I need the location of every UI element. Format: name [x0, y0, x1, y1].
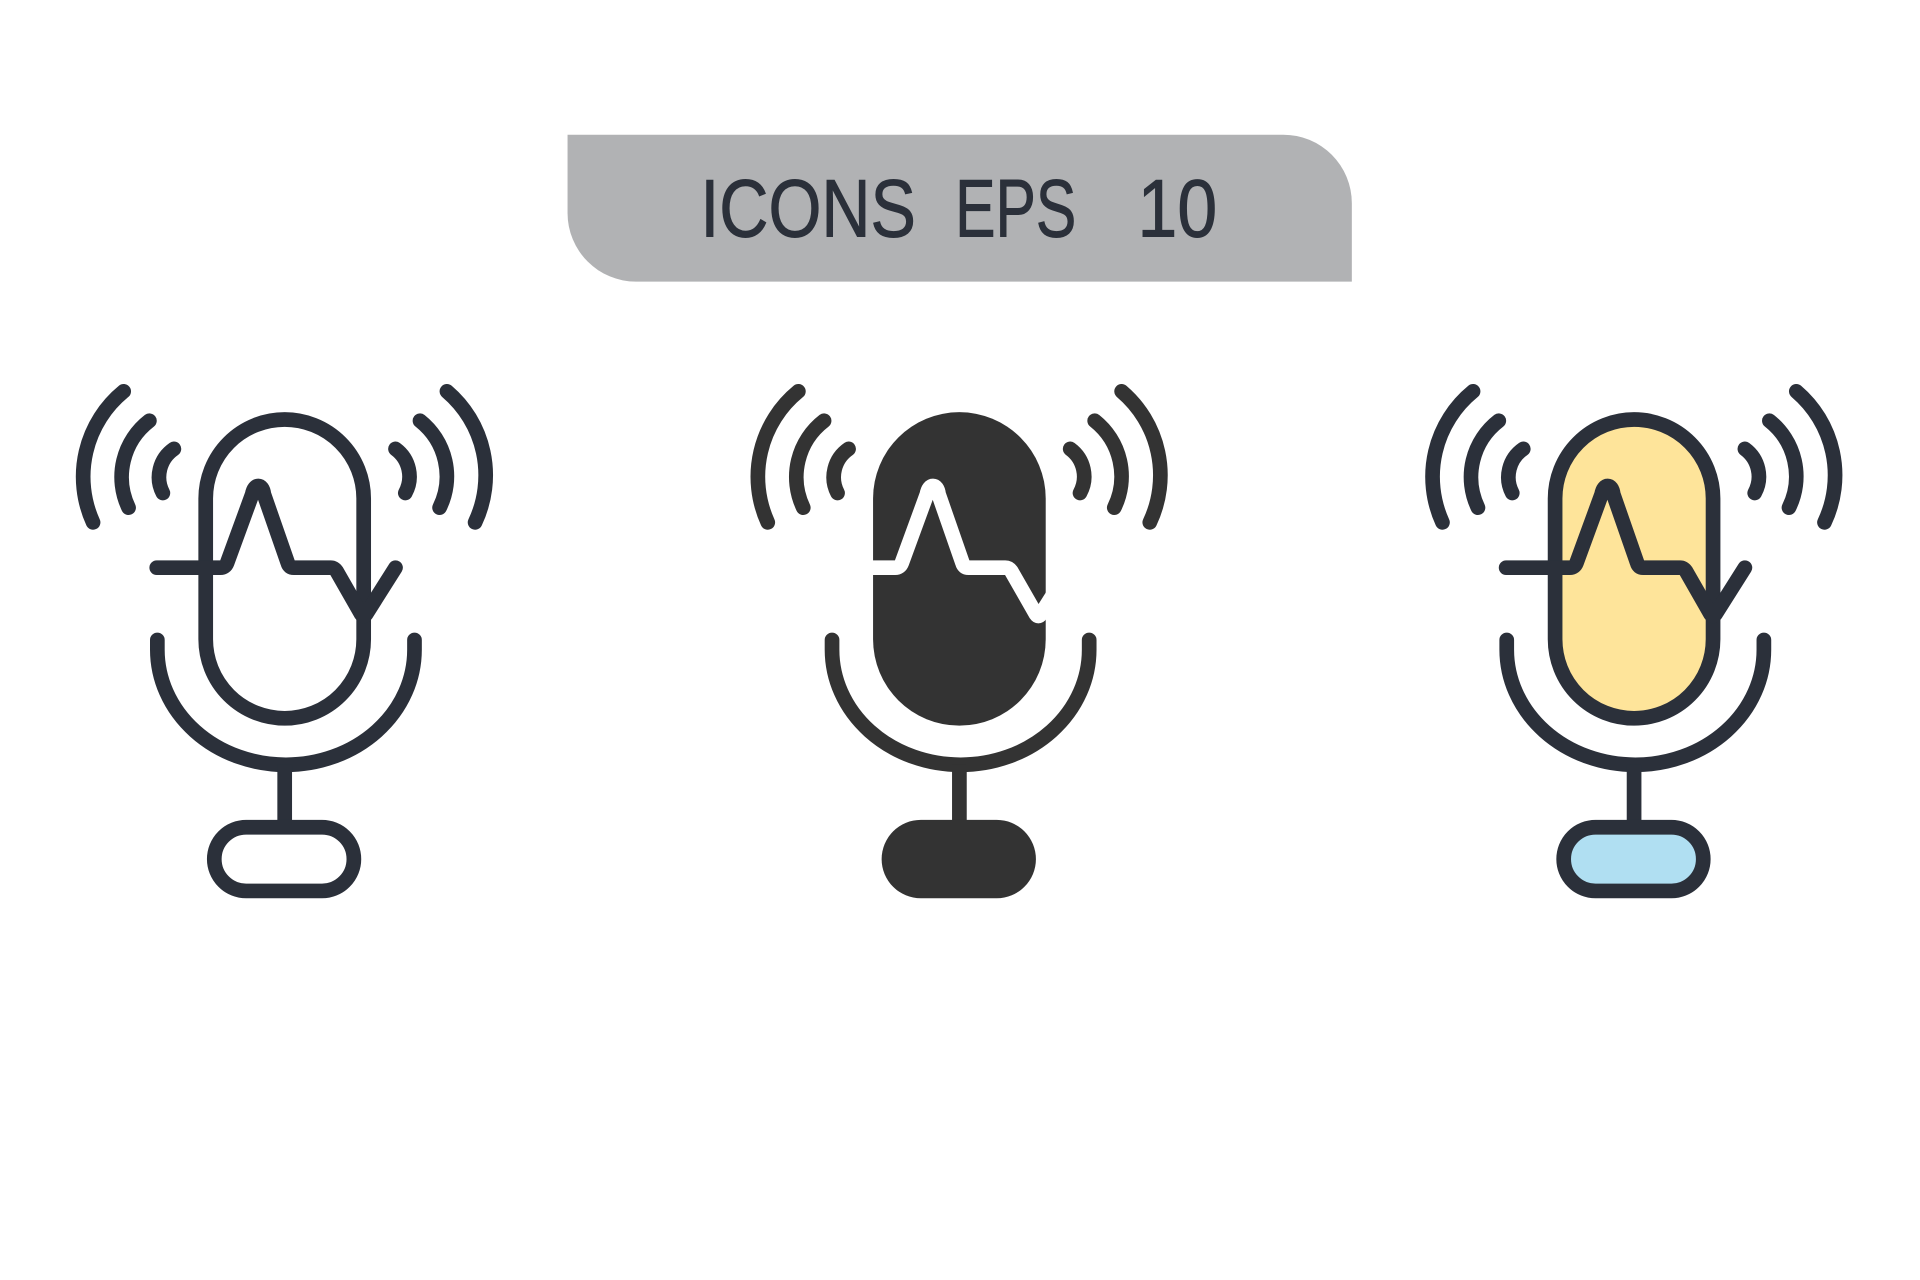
sound waves right: [1070, 391, 1160, 522]
capsule: [873, 412, 1046, 726]
capsule: [206, 420, 364, 718]
icon: outline microphone: [83, 391, 486, 891]
icon: solid microphone: [758, 391, 1160, 898]
sound waves left: [1433, 391, 1523, 522]
banner: ICONS EPS 10: [568, 135, 1352, 282]
sound waves left: [758, 391, 849, 522]
stem: [1628, 765, 1640, 827]
heading text: EPS: [955, 163, 1076, 254]
pulse line: [157, 486, 396, 616]
stem: [953, 765, 965, 827]
banner background: [568, 135, 1352, 282]
heading text: [700, 163, 1217, 254]
pulse line: [1506, 486, 1745, 616]
capsule yellow: [1555, 420, 1713, 718]
sound waves right: [396, 391, 486, 522]
cradle: [1507, 640, 1764, 765]
cradle: [832, 640, 1089, 765]
cradle: [157, 640, 414, 765]
sound waves left: [83, 391, 174, 522]
heading text: ICONS: [700, 163, 916, 254]
heading text: 10: [1138, 163, 1217, 254]
sound waves right: [1745, 391, 1835, 522]
icon: colour microphone: [1433, 391, 1835, 891]
stem: [279, 765, 291, 827]
base: [214, 827, 354, 891]
base blue: [1564, 827, 1703, 891]
base: [882, 820, 1036, 898]
pulse line cut-out: [831, 486, 1070, 616]
